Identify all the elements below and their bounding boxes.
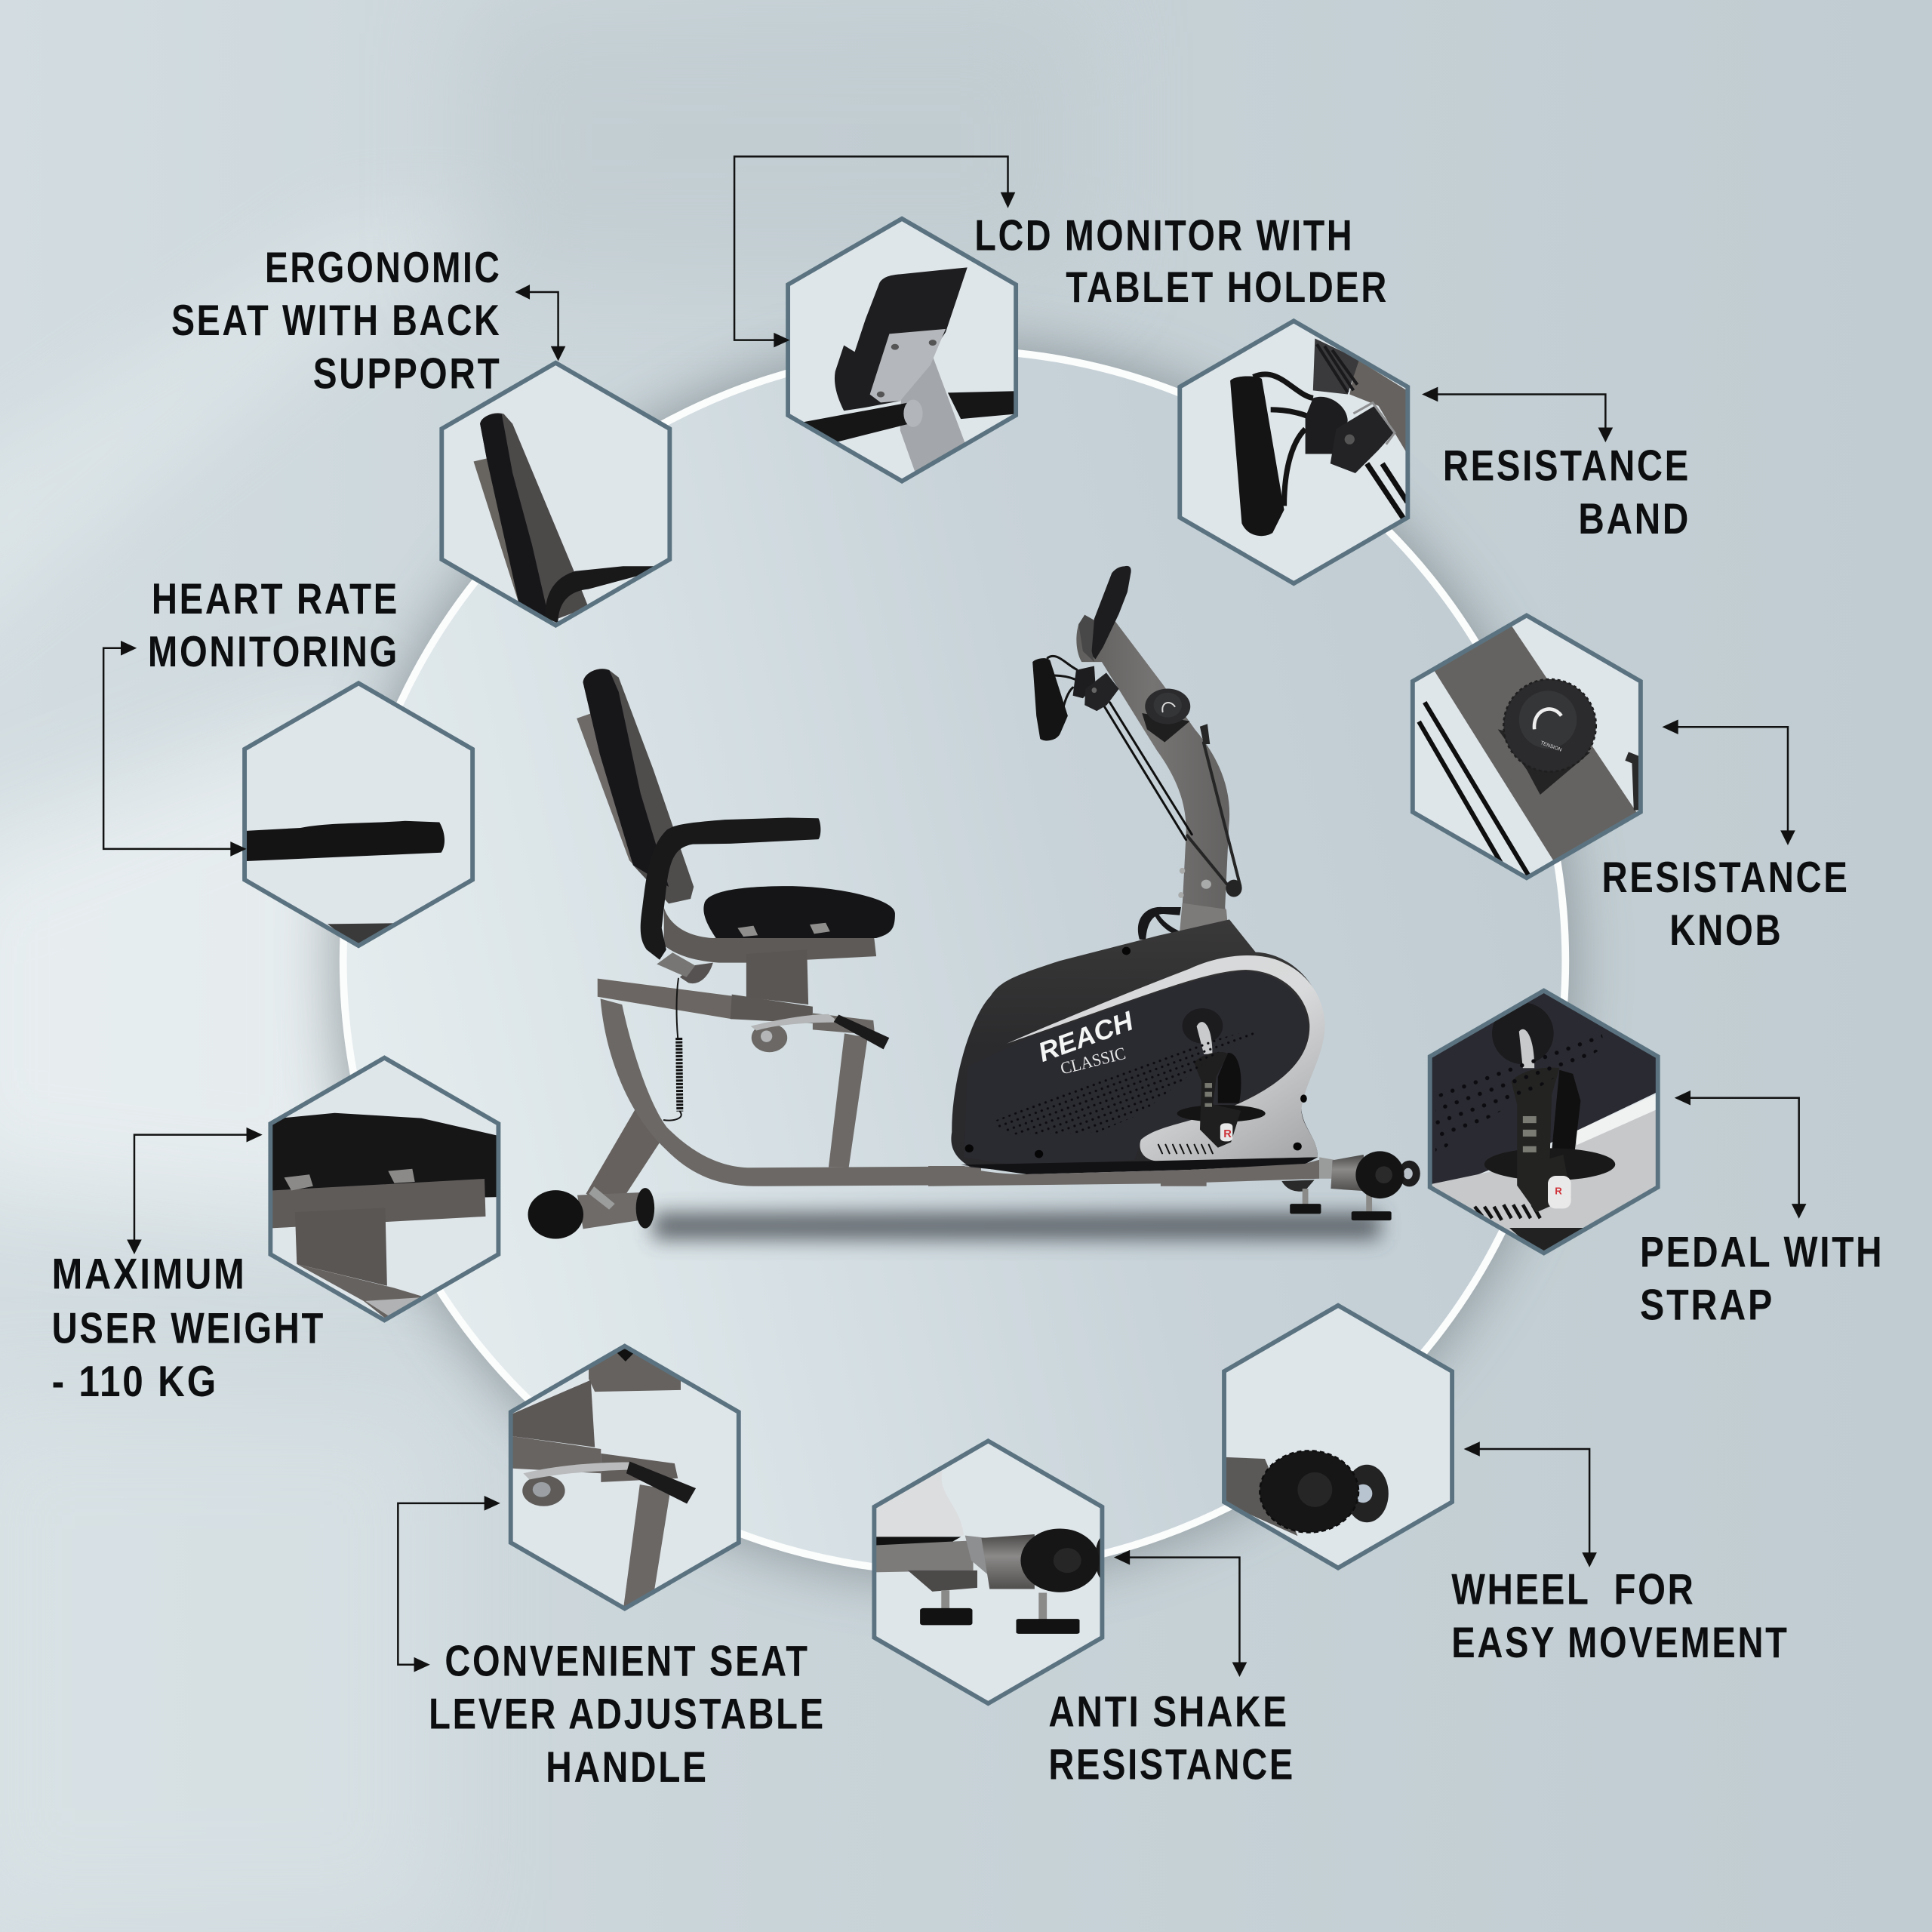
perforation [1435,1032,1604,1158]
arrow: seat lever [398,1496,500,1672]
cable tail [664,1112,681,1121]
knob [1145,688,1190,724]
feature: anti shake levellers [871,1441,1113,1703]
label: wheel: EASY MOVEMENT [1451,1619,1789,1667]
lower seat tube [680,963,713,983]
pulley [1226,880,1242,897]
hexagon outline [441,363,669,626]
front rail [813,1014,875,1035]
arrow: weight [127,1128,263,1254]
bike floor shadow [653,1213,1380,1239]
coil cable [679,1038,680,1112]
feature: pedal with strap [1425,986,1663,1259]
leveler feet [1290,1204,1321,1214]
soft circle shadow [338,345,1571,1577]
label: heart rate: HEART RATE [152,575,399,623]
column bolts [1178,868,1211,898]
foot tube [577,1192,644,1229]
band cord A [1104,706,1186,840]
hexagon background [1430,991,1658,1253]
lever detail [507,1346,696,1607]
foot clamp [589,1186,615,1210]
label: ergonomic seat [171,244,501,398]
label: resistance knob [1601,854,1850,955]
upright column, monitor, handle and knob [1032,566,1242,940]
brand logo CLASSIC: CLASSIC [1059,1044,1128,1078]
bolts [965,947,1307,1158]
pedal rear strap [1138,907,1181,940]
flywheel housing [928,919,1420,1220]
silver swoosh [1007,955,1325,1161]
arrow: band [1422,387,1613,442]
recumbent bike illustration [528,566,1420,1238]
feature: seat lever handle [507,1346,739,1608]
pedal detail: R [1555,1186,1562,1197]
label: ergonomic seat: SUPPORT [313,349,501,398]
feature: ergonomic seat [441,363,669,626]
label: resistance knob: KNOB [1669,906,1783,955]
hexagon background [1224,1306,1452,1568]
pedal detail [1425,986,1663,1259]
label: resistance knob: RESISTANCE [1601,854,1850,902]
tail collar [1319,1157,1334,1179]
strap [1218,1053,1241,1103]
front knob [1355,1151,1404,1198]
pedal slots [1204,1083,1212,1107]
crank boss [1183,1008,1223,1044]
rear foot leg [586,1107,664,1211]
seat support [746,949,808,1004]
label: heart rate: MONITORING [148,628,399,676]
rear wheel [1398,1161,1420,1186]
navy panel [964,971,1308,1168]
label: maximum user weight: MAXIMUM [52,1251,247,1299]
hexagon background [788,219,1016,481]
monitor [1091,566,1131,660]
arrow: knob [1662,719,1795,845]
seat cushion [703,886,895,938]
knob detail: TENSION [1540,740,1562,753]
hexagon outline [1430,991,1658,1253]
bracket [1084,672,1119,711]
handle cords [1048,656,1077,729]
brand logo REACH: REACH [1034,1004,1138,1068]
arrow: seat [515,285,565,361]
hexagon background [874,1441,1102,1703]
hexagon outline [1413,616,1641,878]
housing perforation [993,1029,1256,1135]
label: anti shake: RESISTANCE [1048,1741,1295,1789]
handle foam [1032,658,1068,740]
hexagon outline [788,219,1016,481]
lever hub [761,1031,772,1042]
column collar [1180,903,1228,931]
hexagon outline [1180,321,1407,583]
leveler stems [1303,1189,1372,1213]
grip detail [245,821,445,948]
feature: resistance knob [1413,616,1641,878]
label: ergonomic seat: ERGONOMIC [265,244,501,292]
leveller detail [871,1471,1113,1634]
arrow: heart rate [103,641,247,857]
clamp [1073,666,1096,698]
knob base [1142,713,1190,743]
rail bracket [731,995,813,1023]
band handle detail [1230,338,1413,536]
label: heart rate [148,575,399,676]
arrow: anti shake [1114,1550,1247,1677]
foot plate [1177,1105,1266,1122]
label: maximum user weight: - 110 KG [52,1358,218,1406]
hexagon background [1180,321,1407,583]
feature: LCD monitor [788,219,1016,481]
monitor rear bracket [1078,615,1094,662]
column [1076,620,1229,931]
seat detail [474,413,656,623]
wheel detail [1220,1451,1389,1536]
label: LCD monitor [974,211,1389,312]
lever rod [751,1014,835,1031]
label: LCD monitor: TABLET HOLDER [1066,263,1389,312]
front bar [928,1160,1319,1186]
central white ring circle [343,350,1565,1572]
arrow: wheel [1464,1441,1597,1567]
label: resistance band: BAND [1578,495,1690,543]
label: maximum user weight: USER WEIGHT [52,1305,325,1353]
label: seat lever: CONVENIENT SEAT [445,1637,810,1685]
seat back pad [577,669,694,903]
jack [1200,724,1210,744]
label: seat lever [429,1637,826,1792]
label: resistance band: RESISTANCE [1443,442,1690,491]
hinge [657,952,695,977]
pedal tag letter: R [1223,1128,1232,1140]
cable wire [677,979,678,1038]
U tube [601,998,981,1186]
feature: heart rate grip [245,683,472,948]
black base strip [961,1157,1318,1174]
label: ergonomic seat: SEAT WITH BACK [171,297,501,345]
hexagon background [245,683,472,946]
vents [1158,1145,1213,1153]
feature: resistance band [1180,321,1413,583]
label: anti shake: ANTI SHAKE [1048,1687,1289,1736]
knob detail [1419,626,1640,875]
arrow: LCD [734,156,1015,347]
label: wheel: WHEEL FOR [1451,1566,1696,1614]
pedal arm [1194,1052,1241,1148]
hexagon outline [511,1346,739,1608]
seat bracket [664,908,876,963]
label: resistance band [1443,442,1690,543]
frame, seat and lever [528,817,981,1238]
band cord B [1110,703,1192,835]
tail cylinder [1331,1155,1367,1191]
seat underside detail [272,1113,501,1318]
hexagon outline [270,1058,498,1320]
top rail [598,979,732,1019]
label: pedal with strap: STRAP [1640,1281,1774,1330]
hexagon background [270,1058,498,1320]
label: pedal with strap [1640,1228,1884,1330]
shell [951,919,1324,1172]
lever grip [834,1014,889,1049]
lever wheel [752,1023,787,1052]
band cord C [1187,835,1232,891]
hexagon outline [874,1441,1102,1703]
feature: maximum user weight seat [270,1058,501,1320]
pedal tag [1220,1123,1232,1141]
seat tabs [737,923,830,937]
hexagon outline [245,683,472,946]
gear [1281,1180,1315,1192]
feature: transport wheel [1220,1306,1452,1568]
left foot cap [528,1190,583,1238]
crank [1197,1022,1212,1054]
label: seat lever: HANDLE [546,1743,709,1792]
hexagon background [511,1346,739,1608]
right foot cap [636,1188,654,1229]
rear post [829,1033,868,1168]
armrest [641,817,820,960]
monitor detail [803,267,1015,473]
label: LCD monitor: LCD MONITOR WITH [974,211,1354,260]
label: wheel [1451,1566,1789,1667]
band cord D [1204,743,1240,885]
hexagon background [441,363,669,626]
hexagon background [1413,616,1641,878]
label: anti shake [1048,1687,1295,1789]
label: pedal with strap: PEDAL WITH [1640,1228,1884,1276]
label: maximum user weight [52,1251,325,1406]
arrow: pedal [1675,1091,1806,1219]
hexagon outline [1224,1306,1452,1568]
label: seat lever: LEVER ADJUSTABLE [429,1690,826,1739]
